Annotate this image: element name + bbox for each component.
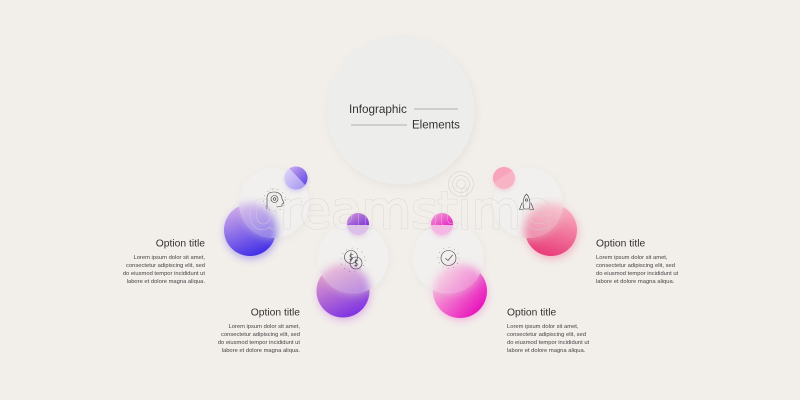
option 2: violet circles: [314, 213, 375, 324]
text block: option 3: [507, 308, 590, 354]
text block: option 4: [596, 238, 679, 285]
text block: option 3: consectetur adipiscing elit, sed: [507, 332, 586, 338]
option 3: magenta circles: [429, 213, 491, 324]
text block: option 2: do eiusmod tempor incididunt ut: [218, 340, 300, 346]
central circle: title badge: [326, 36, 476, 187]
icon: rocket: [520, 194, 534, 210]
divider line top: [414, 108, 458, 110]
icon: coins: [341, 248, 365, 272]
text block: option 3: do eiusmod tempor incididunt ut: [507, 340, 590, 346]
text block: option 1: [123, 238, 205, 285]
icon: head with gear: [264, 189, 286, 211]
text block: option 2: Lorem ipsum dolor sit amet,: [228, 324, 300, 330]
text block: option 1: labore et dolore magna aliqua.: [127, 279, 205, 285]
text block: option 3: Lorem ipsum dolor sit amet,: [507, 324, 579, 330]
heading: Infographic: Infographic: [349, 103, 407, 116]
text block: option 1: Lorem ipsum dolor sit amet,: [133, 255, 205, 261]
text block: option 2: Option title: [251, 308, 300, 318]
text block: option 4: consectetur adipiscing elit, sed: [596, 263, 675, 269]
text block: option 2: [218, 308, 300, 354]
text block: option 3: labore et dolore magna aliqua.: [507, 348, 586, 354]
divider line bottom: [351, 124, 407, 126]
text block: option 3: Option title: [507, 308, 556, 318]
text block: option 1: consectetur adipiscing elit, sed: [126, 263, 205, 269]
text block: option 1: Option title: [156, 238, 205, 250]
text block: option 4: do eiusmod tempor incididunt ut: [596, 271, 679, 277]
icon: clock: [438, 248, 459, 268]
heading: Elements: Elements: [412, 120, 460, 132]
text block: option 4: Option title: [596, 238, 645, 250]
text block: option 2: consectetur adipiscing elit, sed: [221, 332, 300, 338]
text block: option 4: labore et dolore magna aliqua.: [596, 279, 675, 285]
text block: option 1: do eiusmod tempor incididunt ut: [123, 271, 205, 277]
text block: option 4: Lorem ipsum dolor sit amet,: [596, 255, 668, 261]
text block: option 2: labore et dolore magna aliqua.: [222, 348, 300, 354]
watermark outline word: [250, 171, 550, 230]
option 4: pink circles: [492, 166, 578, 259]
option 1: purple circles: [223, 165, 310, 259]
